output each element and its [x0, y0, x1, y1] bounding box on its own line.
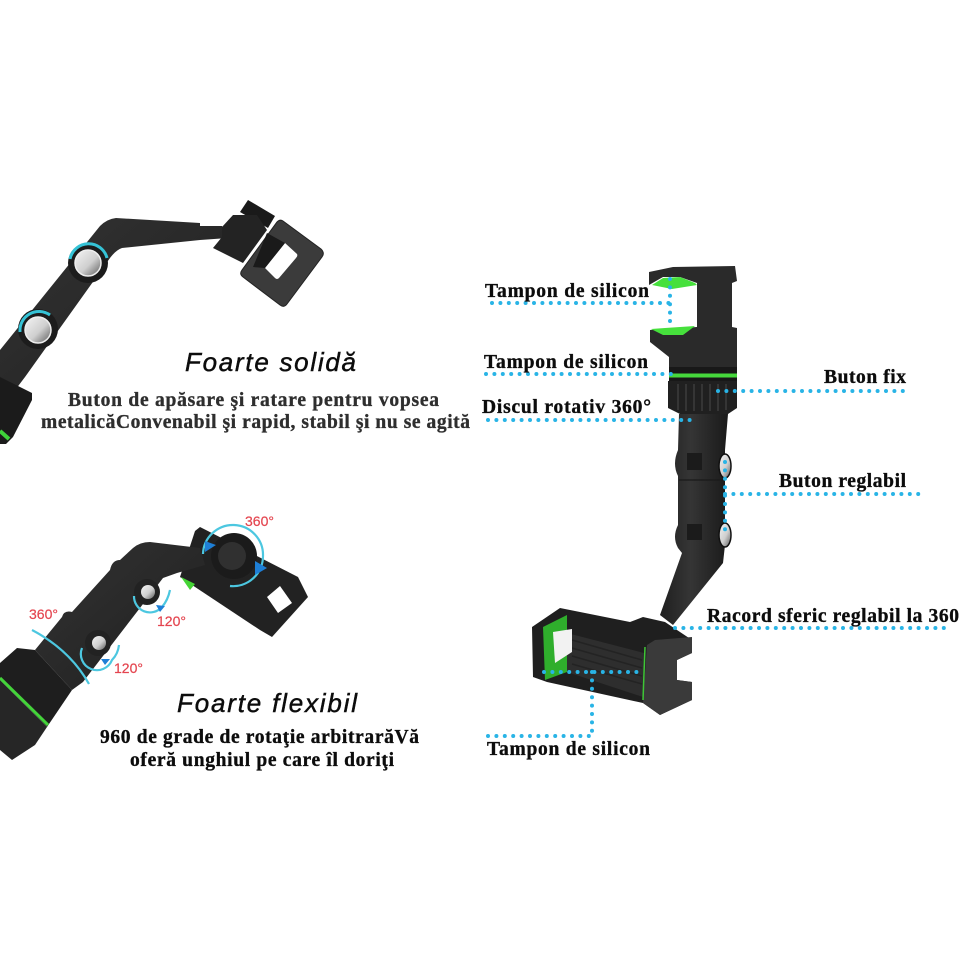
- ball joint: [203, 525, 267, 586]
- front green strip: [643, 647, 645, 700]
- arm body: [35, 542, 205, 690]
- angle labels: 360°: [245, 513, 274, 529]
- arm body: [0, 218, 228, 410]
- bottom phone cradle: [532, 608, 692, 715]
- upper button: [68, 243, 108, 283]
- text block: solid description: [41, 390, 470, 433]
- green pad: [181, 577, 195, 590]
- callout: adjustable button: Buton reglabil: [779, 471, 907, 492]
- heading: very flexible: Foarte flexibil: [177, 688, 358, 718]
- plate opening: [267, 586, 292, 613]
- heading: very solid: Foarte solidă: [185, 347, 356, 377]
- angle labels: 120°: [114, 660, 143, 676]
- upper green pad: [652, 277, 697, 289]
- green side pad: [543, 615, 567, 680]
- lower knob: [81, 630, 119, 670]
- ribbed cradle bed: [567, 633, 644, 697]
- top clamp: [649, 266, 737, 367]
- rotary dial: [668, 381, 737, 414]
- green ring: [0, 431, 9, 439]
- arm joint notches: [687, 453, 702, 540]
- ball mount: [213, 215, 267, 263]
- product photo: full holder: [532, 266, 737, 715]
- callout: adjustable button: [725, 462, 920, 535]
- product photo: solid arm close-up: [0, 200, 323, 444]
- green ring: [0, 678, 48, 725]
- lower silver knob: [719, 523, 731, 547]
- upper silver knob: [719, 454, 731, 478]
- callout: ball joint: Racord sferic reglabil la 360: [707, 606, 959, 627]
- green band: [669, 374, 737, 378]
- text block: solid description: Buton de apăsare şi ratare pentru vopsea: [68, 390, 439, 411]
- callout: rotary disc: Discul rotativ 360°: [482, 397, 651, 418]
- arm seam: [679, 479, 725, 481]
- text block: flexible description: 960 de grade de rotaţie arbitrarăVă: [100, 727, 419, 748]
- square clamp plate: [241, 220, 323, 306]
- lower green pad: [651, 326, 695, 335]
- callout: silicone pad bottom: [487, 672, 650, 760]
- ribbed stem: [253, 233, 285, 268]
- product photo: flexible arm with rotation marks: [0, 513, 308, 760]
- angle labels: 360°: [29, 606, 58, 622]
- angle labels: [29, 513, 274, 676]
- text block: solid description: metalicăConvenabil şi rapid, stabil şi nu se agită: [41, 412, 470, 433]
- threaded collar: [0, 377, 32, 444]
- front jaw: [643, 637, 692, 715]
- rotation ellipse: [32, 630, 89, 684]
- angle labels: 120°: [157, 613, 186, 629]
- collar band: [669, 367, 737, 382]
- rear clamp plate: [180, 527, 308, 637]
- plate opening: [265, 243, 297, 279]
- callout: silicone pad top: Tampon de silicon: [485, 281, 649, 302]
- text block: flexible description: oferă unghiul pe care îl doriţi: [130, 750, 395, 771]
- text block: flexible description: [100, 727, 419, 771]
- side opening: [553, 629, 572, 663]
- adjustable arm: [660, 414, 728, 625]
- threaded collar: [0, 648, 72, 727]
- lower handle: [0, 680, 47, 760]
- back clamp block: [240, 200, 275, 228]
- callout: fixed button: Buton fix: [824, 367, 906, 388]
- callout: silicone pad bottom: Tampon de silicon: [487, 739, 650, 760]
- upper knob: [134, 579, 170, 612]
- callout: silicone pad middle: Tampon de silicon: [484, 352, 648, 373]
- lower button: [18, 309, 58, 349]
- callout: silicone pad top: [485, 279, 670, 322]
